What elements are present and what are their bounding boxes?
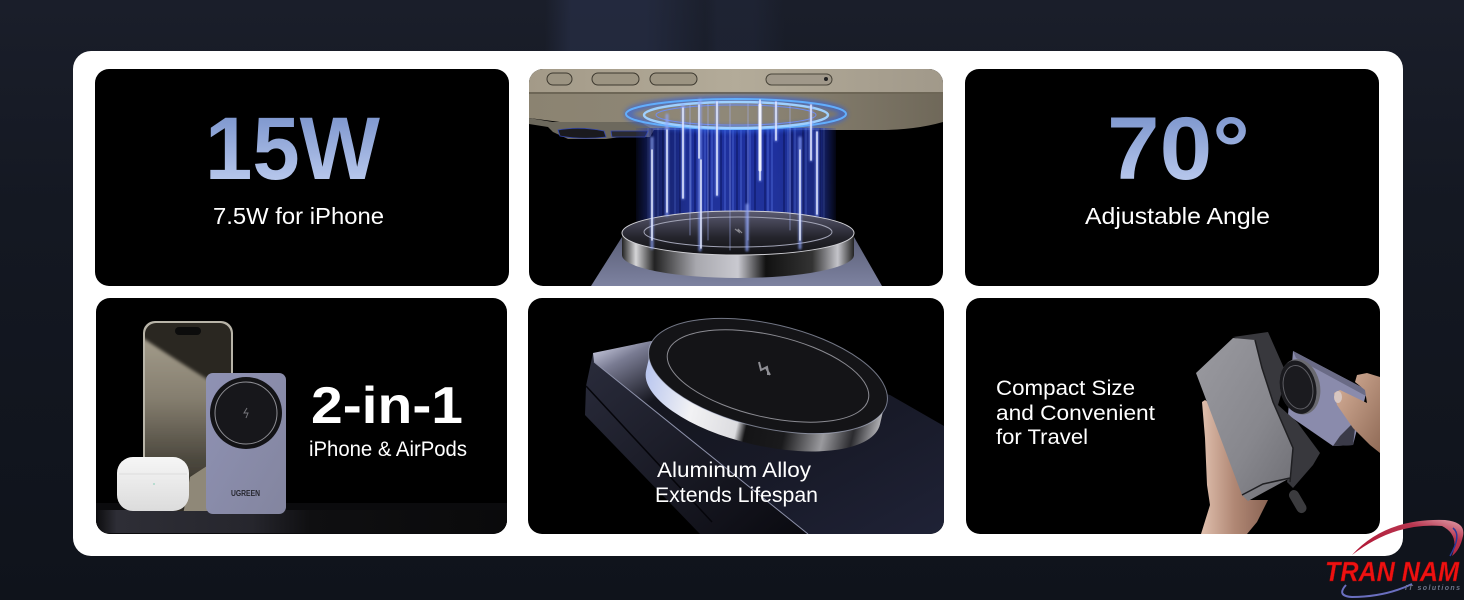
charger body in pouch [1288, 351, 1367, 446]
heading: 2-in-1: 2-in-1 [311, 377, 463, 435]
logo: UGREEN: UGREEN [231, 489, 260, 498]
zipper pull [1289, 490, 1306, 514]
wireless charger [206, 373, 286, 514]
light streaks [652, 100, 817, 250]
logo tagline: IT solutions [1405, 585, 1460, 592]
magnetic disc [646, 318, 888, 452]
text: Compact Size and Convenient for Travel: Compact Size [996, 377, 1135, 400]
white card [73, 51, 1403, 556]
text: Aluminum Alloy Extends Lifespan [655, 459, 818, 507]
charger body [585, 341, 944, 534]
heading: 70°: 70° [1107, 98, 1250, 198]
phone edge [529, 69, 943, 130]
panel: wireless charging photo [529, 69, 943, 286]
panel: 70 degrees [965, 69, 1379, 286]
magnetic disc [622, 211, 854, 278]
glow ring [626, 99, 846, 129]
panel: aluminum alloy [528, 298, 944, 534]
text: 7.5W for iPhone: 7.5W for iPhone [213, 203, 384, 229]
AirPods case [117, 457, 189, 511]
left hand [1201, 400, 1268, 534]
panel: compact size [966, 298, 1380, 534]
right hand [1334, 373, 1380, 453]
phone [140, 321, 233, 515]
text: Compact Size and Convenient for Travel: and Convenient [996, 402, 1155, 425]
text: Compact Size and Convenient for Travel [996, 380, 1155, 444]
text: Aluminum Alloy Extends Lifespan: Aluminum Alloy [657, 459, 812, 482]
camera bump [529, 118, 654, 139]
charging disc [210, 377, 282, 449]
text: Compact Size and Convenient for Travel: for Travel [996, 426, 1088, 449]
travel pouch [1196, 332, 1320, 515]
charger stand [591, 237, 882, 286]
heading: 15W: 15W [205, 98, 380, 198]
panel: 15W [95, 69, 509, 286]
logo swoosh [1342, 520, 1463, 597]
logo: Tran Nam [1325, 520, 1463, 597]
panel: 2-in-1 [96, 298, 507, 534]
text: Adjustable Angle: Adjustable Angle [1085, 203, 1270, 229]
charger disc [1280, 359, 1320, 414]
charging beam [636, 128, 836, 222]
text: iPhone & AirPods: iPhone & AirPods [309, 438, 467, 461]
text: Aluminum Alloy Extends Lifespan: Extends Lifespan [655, 484, 818, 507]
